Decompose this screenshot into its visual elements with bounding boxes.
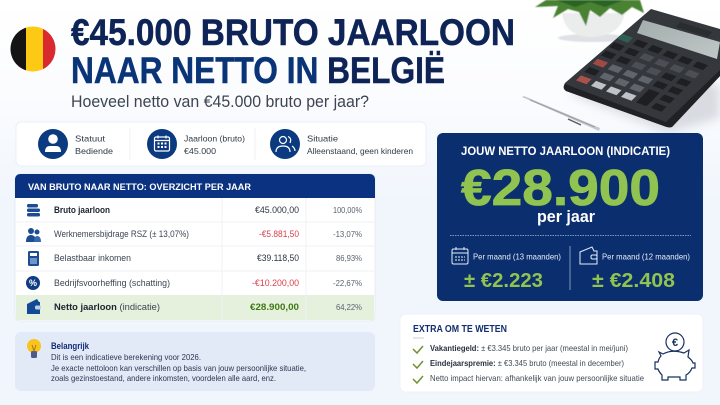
row: bedrijfsvoorheffing: -€10.200,00 [252,278,299,288]
icon: plant [535,0,644,42]
text: jaarloon: €45.000 [184,146,216,156]
heading: JOUW NETTO JAARLOON (INDICATIE) [461,146,670,158]
row: belastbaar inkomen: €39.118,50 [257,253,299,263]
panel: info bar [16,122,426,166]
note text [51,353,306,383]
title: NAAR NETTO IN BELGIË [71,50,445,91]
text: statuut: Bediende [75,146,113,156]
icon: light bulb [27,339,41,358]
row: belastbaar inkomen [54,253,362,263]
icon: people [270,129,300,159]
row: belastbaar inkomen: Belastbaar inkomen [54,253,131,263]
icon: coins [27,204,40,216]
icon: Belgian flag [10,26,57,72]
panel: important note [15,332,375,391]
note text: zoals gezinstoestand, andere inkomsten, voordelen alle aard, enz. [51,374,276,383]
icon: percent [26,276,40,290]
row: netto jaarloon: Netto jaarloon (indicatie) [54,302,160,312]
icon: percent: % [29,278,37,288]
row: netto jaarloon [54,302,362,312]
text: situatie: Alleenstaand, geen kinderen [307,146,413,156]
text: jaarloon: Jaarloon (bruto) [184,134,245,144]
heading: Belangrijk [51,341,90,351]
text: situatie: Situatie [307,134,338,144]
text: situatie [307,134,413,156]
row: bruto jaarloon: Bruto jaarloon [54,205,110,215]
icon: wallet [27,299,41,314]
row: bruto jaarloon: 100,00% [333,205,362,215]
icon: calendar [147,129,177,159]
subtitle: Hoeveel netto van €45.000 bruto per jaar? [71,92,369,111]
row: bedrijfsvoorheffing: -22,67% [333,278,362,288]
heading: EXTRA OM TE WETEN [413,324,507,335]
icon: taxable document [28,251,39,266]
row: RSZ [54,229,362,239]
table header [15,174,375,198]
row: RSZ: -13,07% [333,229,362,239]
panel: table [15,174,375,321]
row: RSZ: -€5.881,50 [259,229,299,239]
title [71,12,515,91]
icon: calculator [564,9,720,133]
icon: calendar outline [452,247,468,264]
row: belastbaar inkomen: 86,93% [336,253,362,263]
row: RSZ: Werknemersbijdrage RSZ (± 13,07%) [54,229,189,239]
monthly amount 12: Per maand (12 maanden) [602,252,690,262]
icon: pen [522,96,600,131]
big amount: €28.900 [461,159,660,216]
text: statuut [75,134,113,156]
item: netto impact: Netto impact hiervan: afhankelijk van jouw persoonlijke situatie [430,373,644,383]
row: bedrijfsvoorheffing: Bedrijfsvoorheffing (schatting) [54,278,170,288]
row: bruto jaarloon [54,205,362,215]
monthly amount 13 [464,252,561,292]
panel: net salary [437,133,703,301]
table heading text: VAN BRUTO NAAR NETTO: OVERZICHT PER JAAR [28,182,251,193]
icon: piggy bank [655,333,695,380]
per jaar: per jaar [537,208,596,226]
text: jaarloon [184,134,245,156]
monthly amount 13: ± €2.223 [464,270,543,292]
row: bedrijfsvoorheffing [54,278,362,288]
monthly amount 12 [592,252,690,292]
text: statuut: Statuut [75,134,106,144]
item: vakantiegeld: Vakantiegeld: ± €3.345 bruto per jaar (meestal in mei/juni) [430,343,628,353]
title: €45.000 BRUTO JAARLOON [71,12,515,53]
row: netto jaarloon: €28.900,00 [250,302,299,312]
note text: Dit is een indicatieve berekening voor 2026. [51,353,201,362]
panel: extra info [400,314,703,392]
note text: Je exacte nettoloon kan verschillen op basis van jouw persoonlijke situatie, [51,364,306,373]
icon: person [38,129,68,159]
monthly amount 13: Per maand (13 maanden) [473,252,561,262]
icon: piggy bank: € [672,337,678,349]
photo: desk with plant, calculator and pen [522,0,720,133]
net row background [16,295,374,320]
row: bruto jaarloon: €45.000,00 [255,205,299,215]
item: eindejaarspremie: Eindejaarspremie: ± €3.345 bruto (meestal in december) [430,358,624,368]
monthly amount 12: ± €2.408 [592,270,675,292]
row: netto jaarloon: 64,22% [336,302,362,312]
icon: employees [26,228,41,242]
icon: wallet outline [580,247,597,264]
